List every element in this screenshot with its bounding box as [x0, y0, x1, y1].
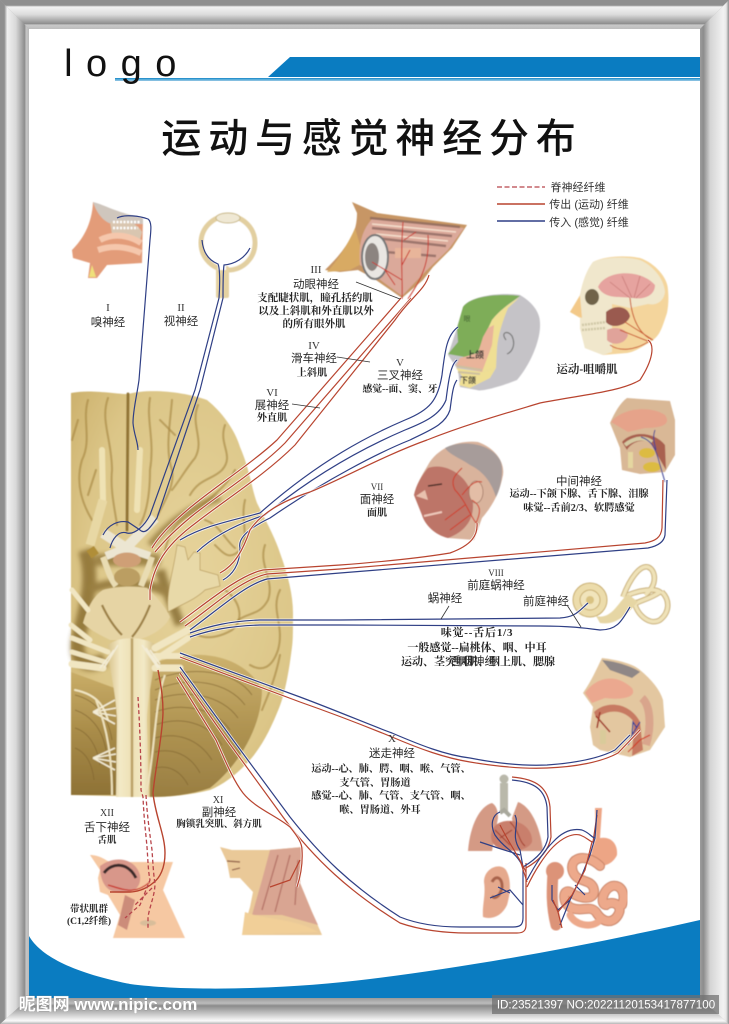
- labels: IX glossopharyngeal: 舌咽神经: [450, 654, 496, 668]
- labels: XI accessory: 胸锁乳突肌、斜方肌: [176, 818, 262, 830]
- labels: VI abducens: 外直肌: [257, 411, 287, 424]
- labels: III oculomotor: [257, 264, 400, 330]
- labels: III oculomotor: 的所有眼外肌: [282, 317, 346, 330]
- labels: IV trochlear: [291, 340, 370, 379]
- nerve: VIII vestibulocochlear: [190, 603, 630, 637]
- labels: IV trochlear: 滑车神经: [291, 351, 337, 365]
- optic chiasm and pituitary: [103, 518, 155, 586]
- labels: IV trochlear: 上斜肌: [297, 366, 327, 379]
- labels: intermediate: 中间神经: [556, 474, 602, 488]
- icon: pharynx section: [583, 658, 665, 757]
- icon: orbit with eye muscles: [325, 202, 467, 299]
- labels: VIII vestibulocochlear: 前庭神经: [523, 594, 569, 608]
- icon: skull with masticatory muscles: [570, 256, 668, 355]
- cerebellum: [71, 672, 120, 795]
- labels: VII facial: [360, 482, 395, 519]
- labels: XII hypoglossal: [67, 808, 130, 927]
- icon: trigeminal face map: 上颌: [466, 349, 484, 360]
- nerve: V motor to masticatory muscles: [220, 340, 652, 573]
- labels: II optic: [164, 302, 199, 328]
- labels: intermediate: 味觉--舌前2/3、软腭感觉: [523, 501, 636, 514]
- labels: XI accessory: XI: [213, 795, 223, 806]
- nerve: XII hypoglossal: [110, 670, 165, 928]
- labels: VIII vestibulocochlear: VIII: [488, 568, 504, 578]
- labels: VIII vestibulocochlear: [428, 568, 581, 627]
- deep shadows: [77, 498, 220, 664]
- image id strip: ID:23521397 NO:20221120153417877100: [497, 998, 715, 1012]
- icon: trigeminal face map: 眼: [464, 315, 470, 323]
- icon: face with facial muscles: [414, 442, 503, 540]
- logo text: logo: [64, 43, 190, 85]
- labels: II optic: 视神经: [164, 314, 199, 328]
- nerve: II optic: [103, 240, 250, 548]
- labels: V trigeminal: V: [396, 357, 404, 369]
- labels: III oculomotor: 以及上斜肌和外直肌以外: [258, 304, 375, 317]
- labels: XII hypoglossal: 舌下神经: [84, 820, 130, 834]
- labels: X vagus: [311, 733, 471, 816]
- nerve: intermediate: [185, 480, 667, 630]
- title: 运动与感觉神经分布: [161, 117, 583, 161]
- icon: stomach and intestines: [546, 808, 624, 925]
- labels: IX glossopharyngeal: 运动、茎突咽肌、咽上肌、腮腺: [401, 654, 555, 668]
- cranial nerve roots: [71, 590, 188, 795]
- icon: lungs and heart: [468, 774, 543, 851]
- labels: I olfactory: I: [106, 302, 110, 314]
- labels: XII hypoglossal: XII: [100, 808, 114, 819]
- labels: intermediate: 运动--下颌下腺、舌下腺、泪腺: [509, 487, 649, 500]
- icon: cochlea and semicircular canals: [573, 567, 668, 623]
- pons: [83, 587, 170, 640]
- legend: 传入 (感觉) 纤维: [549, 216, 629, 229]
- icon: eyeball: [201, 213, 255, 298]
- labels: VII facial: 面神经: [360, 492, 395, 506]
- olfactory tracts: [86, 450, 140, 558]
- labels: V trigeminal: 感觉--面、窦、牙: [362, 382, 438, 395]
- labels: IX glossopharyngeal: 味觉--舌后1/3: [441, 625, 513, 639]
- icon: outer ear: [483, 866, 510, 918]
- nerve: XI accessory: [177, 677, 302, 887]
- labels: IX glossopharyngeal: 一般感觉--扁桃体、咽、中耳: [407, 640, 547, 654]
- legend: 传出 (运动) 纤维: [549, 197, 629, 211]
- legend: 脊神经纤维: [550, 180, 606, 194]
- brainstem: [108, 638, 156, 797]
- labels: XII hypoglossal: 带状肌群: [69, 903, 108, 915]
- nerve: V trigeminal sensory: [180, 327, 458, 580]
- gyri: [72, 394, 280, 710]
- icon: oral and nasal cavity section: [610, 398, 675, 482]
- labels: III oculomotor: 支配睫状肌，瞳孔括约肌: [257, 291, 373, 304]
- icon: head with hyoid and strap muscles: [90, 855, 185, 938]
- icon: trigeminal face map: 下颌: [460, 375, 476, 385]
- nerve: VII facial: [180, 523, 477, 622]
- labels: X vagus: 支气管、胃肠道: [339, 776, 411, 789]
- labels: VII facial: VII: [371, 482, 383, 492]
- labels: X vagus: 运动--心、肺、腭、咽、喉、气管、: [311, 762, 471, 775]
- labels: V trigeminal: 三叉神经: [377, 368, 423, 382]
- labels: II optic: II: [177, 302, 185, 314]
- labels: VIII vestibulocochlear: 蜗神经: [428, 591, 463, 605]
- labels: XI accessory: 副神经: [202, 805, 237, 819]
- labels: V trigeminal: [362, 357, 438, 395]
- labels: VII facial: 面肌: [367, 506, 387, 519]
- nerve: X vagus to pharynx: [180, 653, 640, 768]
- watermark: 昵图网 www.nipic.com: [19, 995, 197, 1014]
- labels: VI abducens: VI: [266, 387, 278, 399]
- labels: III oculomotor: III: [310, 264, 322, 276]
- nerve: X vagus to viscera: [180, 667, 597, 933]
- labels: X vagus: 感觉--心、肺、气管、支气管、咽、: [311, 789, 471, 802]
- label: masticatory: 运动-咀嚼肌: [556, 362, 618, 376]
- labels: III oculomotor: 动眼神经: [293, 277, 339, 291]
- labels: I olfactory: [91, 302, 126, 329]
- legend: [497, 180, 629, 229]
- icon: trigeminal face map: [448, 294, 540, 390]
- labels: VIII vestibulocochlear: 前庭蜗神经: [467, 578, 525, 592]
- labels: XII hypoglossal: (C1,2纤维): [67, 915, 111, 927]
- labels: I olfactory: 嗅神经: [91, 315, 126, 329]
- nerves: III IV VI: [150, 275, 429, 600]
- labels: intermediate: [509, 474, 649, 514]
- image id strip: [492, 995, 719, 1014]
- labels: X vagus: 喉、胃肠道、外耳: [339, 803, 421, 816]
- labels: VI abducens: [255, 387, 320, 424]
- labels: X vagus: X: [388, 733, 396, 745]
- labels: XI accessory: [176, 795, 262, 830]
- labels: XII hypoglossal: 舌肌: [97, 834, 117, 846]
- labels: X vagus: 迷走神经: [369, 746, 415, 760]
- labels: IX glossopharyngeal: [401, 625, 555, 668]
- labels: VI abducens: 展神经: [255, 398, 290, 412]
- icon: neck with sternocleidomastoid and trapezius: [220, 847, 322, 935]
- header band: [115, 57, 700, 80]
- nerve: I olfactory: [117, 216, 151, 450]
- brain base view: [71, 391, 293, 797]
- icon: nose section: [72, 202, 143, 278]
- labels: IV trochlear: IV: [308, 340, 320, 352]
- trigeminal root: [168, 545, 220, 612]
- bottom blue swoosh: [29, 920, 700, 998]
